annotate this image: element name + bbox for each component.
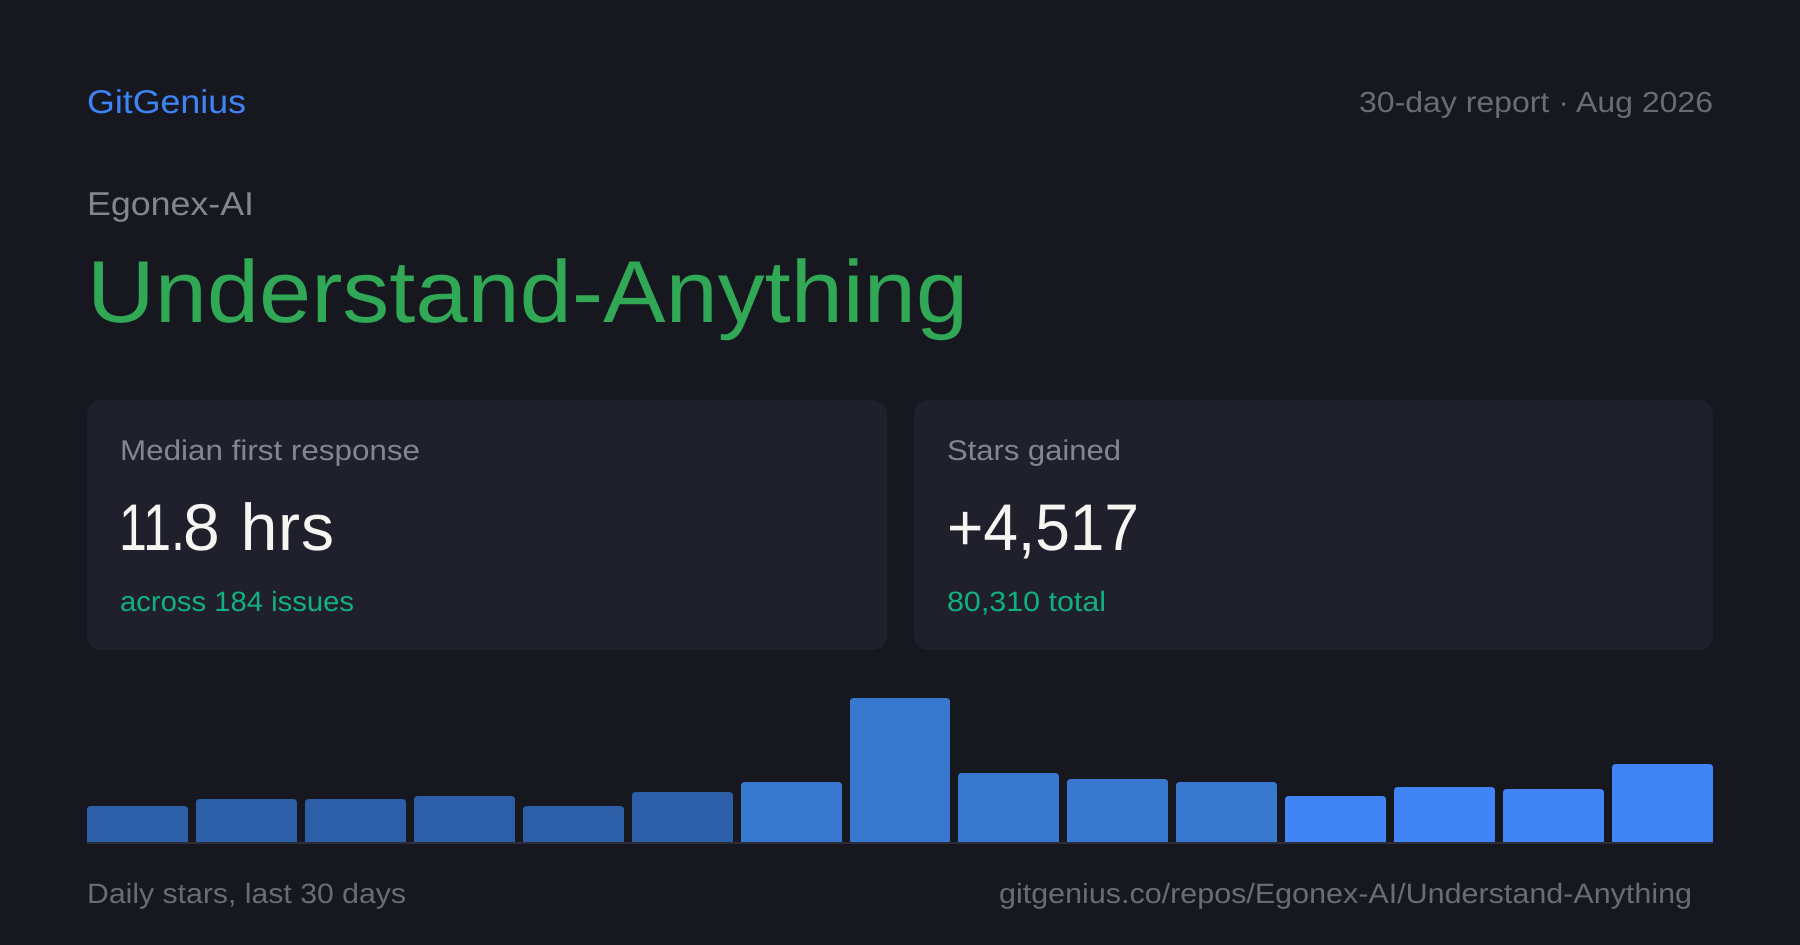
- bar 2: [196, 799, 297, 842]
- bar 1: [87, 806, 188, 842]
- panel: median first response: [87, 400, 887, 650]
- bar 10: [1067, 779, 1168, 842]
- metric value: +4,517: [947, 490, 1139, 564]
- panel background: [87, 400, 887, 650]
- bar 14: [1503, 789, 1604, 842]
- metric label: Stars gained: [947, 435, 1121, 467]
- panel: stars gained: [914, 400, 1713, 650]
- bar 3: [305, 799, 406, 842]
- bar 5: [523, 806, 624, 842]
- bar 7: [741, 782, 842, 842]
- chart caption: Daily stars, last 30 days: [87, 878, 406, 909]
- panel background: [914, 400, 1713, 650]
- bar 6: [632, 792, 733, 842]
- metric label: Median first response: [120, 435, 420, 467]
- bar 4: [414, 796, 515, 842]
- metric note: 80,310 total: [947, 586, 1106, 617]
- title: repo name: Understand-Anything: [87, 242, 968, 341]
- header brand: GitGenius: [87, 83, 246, 120]
- bar 15: [1612, 764, 1713, 842]
- metric value: 8 hrs: [183, 490, 334, 564]
- bar 11: [1176, 782, 1277, 842]
- repo url: gitgenius.co/repos/Egonex-AI/Understand-Anything: [999, 878, 1692, 909]
- metric note: across 184 issues: [120, 586, 354, 617]
- bar 13: [1394, 787, 1495, 842]
- chart baseline: [87, 842, 1713, 844]
- repo owner: Egonex-AI: [87, 185, 254, 222]
- report period: 30-day report · Aug 2026: [1359, 87, 1713, 119]
- bar 8: [850, 698, 950, 842]
- bar 9: [958, 773, 1059, 842]
- bar chart: daily stars: [87, 698, 1713, 844]
- bar 12: [1285, 796, 1386, 842]
- metric value: 11.: [119, 490, 185, 564]
